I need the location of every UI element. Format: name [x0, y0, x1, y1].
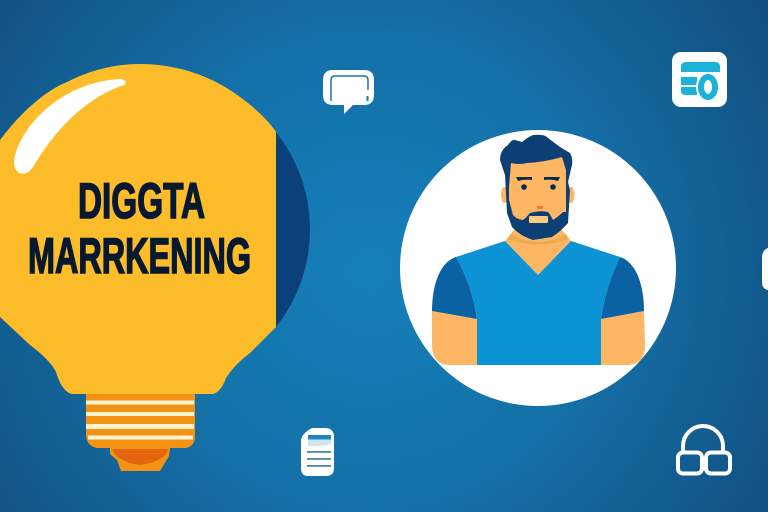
- bulb glass: [0, 64, 276, 394]
- panel: light bulb: [0, 64, 310, 471]
- icon: storage and camera card: [672, 52, 727, 107]
- heading: MARRKENING: [28, 228, 251, 284]
- right arm: [601, 311, 645, 365]
- neck shadow: [507, 234, 569, 244]
- left sleeve: [432, 257, 477, 319]
- eyes and brows: [516, 177, 560, 190]
- bulb base: [86, 392, 195, 471]
- ears: [501, 187, 574, 203]
- icon: partial card at right edge: [762, 248, 768, 290]
- bulb shadow circle: [276, 132, 310, 327]
- neck: [505, 225, 571, 275]
- panel: person portrait: [400, 130, 676, 406]
- mouth: [529, 216, 548, 223]
- right sleeve: [601, 257, 644, 319]
- left arm: [432, 311, 477, 365]
- heading: [28, 173, 251, 284]
- beard and hair: [500, 135, 572, 240]
- heading: DIGGTA: [78, 173, 205, 229]
- torso: [456, 241, 620, 365]
- bulb highlight: [14, 79, 126, 174]
- white circle: [400, 130, 676, 406]
- icon: document: [301, 428, 334, 476]
- face: [509, 157, 566, 220]
- icon: headphones: [678, 426, 730, 474]
- nose: [537, 206, 543, 209]
- icon: chat bubble: [323, 70, 374, 114]
